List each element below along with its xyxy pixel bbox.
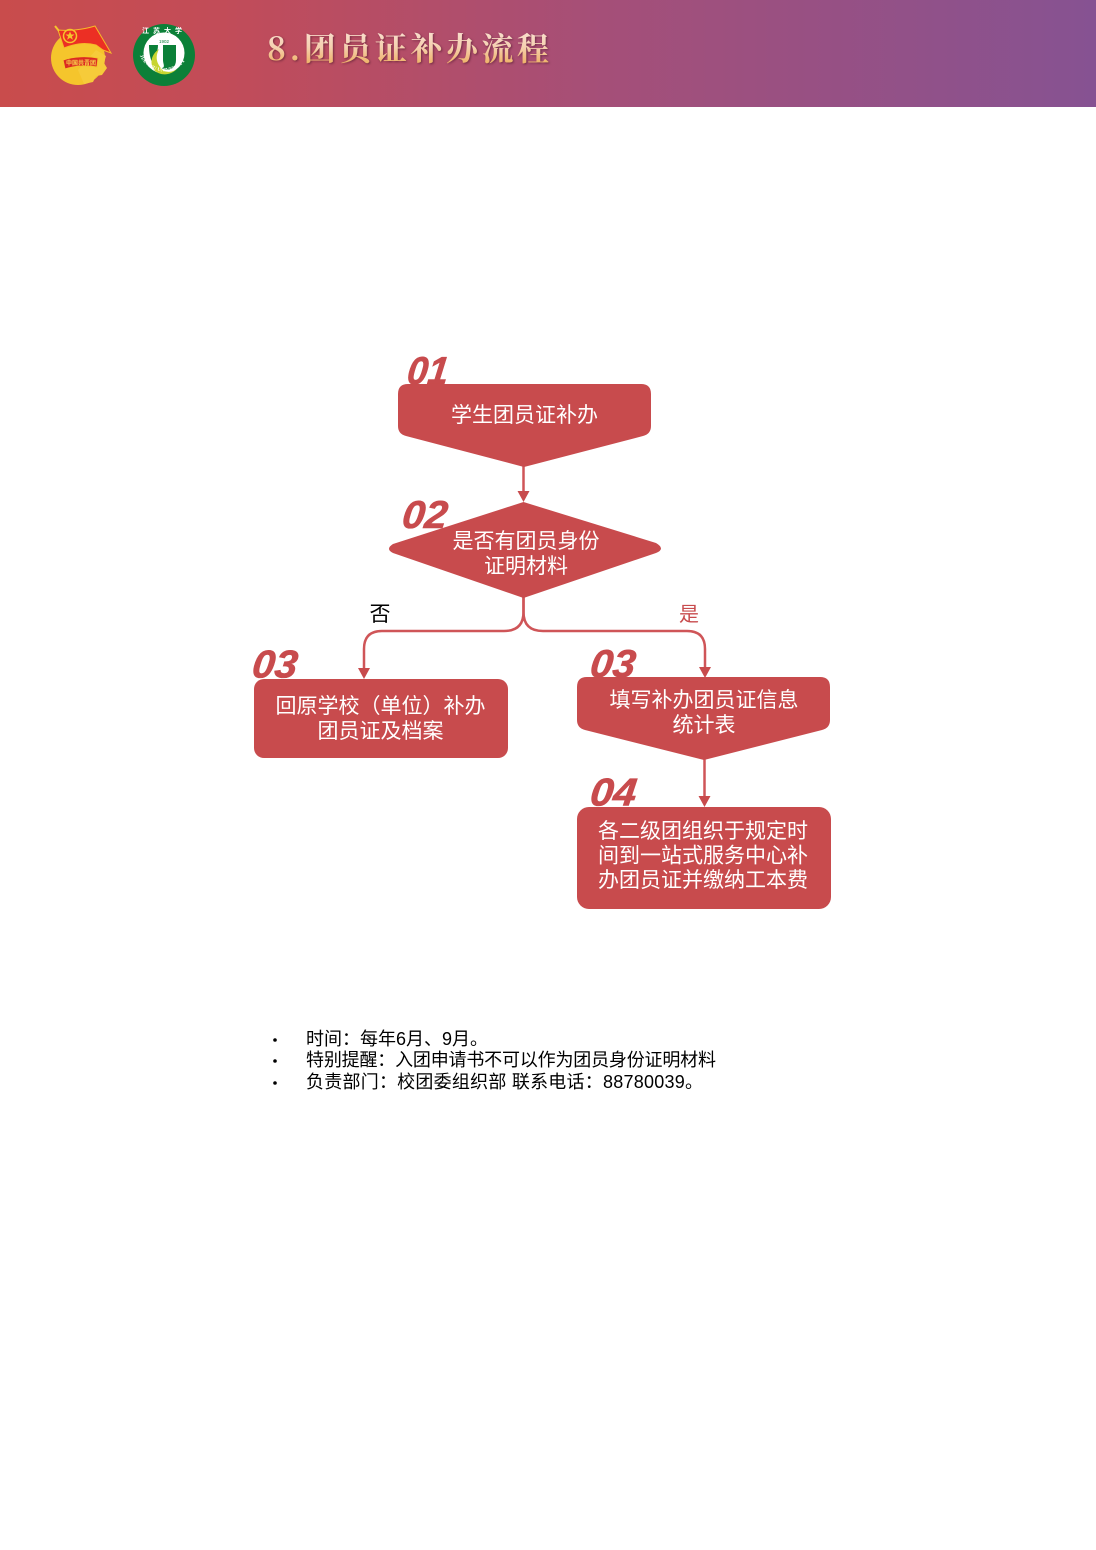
note: department: 负责部门：校团委组织部 联系电话：88780039。 bbox=[306, 1072, 703, 1092]
diamond label: 证明材料 bbox=[484, 555, 568, 578]
icon: Jiangsu University logo: 江苏大学 bbox=[142, 26, 186, 35]
connector: branch yes bbox=[524, 597, 705, 667]
icon: youth league badge: 中国共青团 bbox=[66, 58, 96, 67]
note: time: 时间：每年6月、9月。 bbox=[306, 1029, 488, 1049]
box: student applies bbox=[398, 384, 651, 467]
notes list bbox=[273, 1029, 716, 1092]
connector: branch no bbox=[364, 597, 524, 668]
step 01 bbox=[398, 350, 651, 467]
header banner bbox=[0, 0, 1096, 107]
number 02: 02 bbox=[400, 494, 450, 537]
box label: 各二级团组织于规定时 bbox=[598, 820, 808, 843]
number 03 left: 03 bbox=[250, 644, 300, 686]
connector: 01 to 02 bbox=[522, 466, 525, 491]
connector: 03 to 04 bbox=[703, 759, 706, 796]
diamond: has proof of membership bbox=[389, 502, 661, 598]
note: reminder: 特别提醒：入团申请书不可以作为团员身份证明材料 bbox=[306, 1050, 716, 1070]
label: yes: 是 bbox=[679, 604, 699, 626]
title: 8.团员证补办流程 bbox=[267, 24, 549, 70]
icon: Jiangsu University logo: JIANGSU UNIVERSITY bbox=[140, 54, 185, 72]
diamond label: 是否有团员身份 bbox=[452, 530, 600, 553]
icon: Jiangsu University logo: 1902 bbox=[159, 39, 170, 44]
box label: 团员证及档案 bbox=[318, 720, 444, 743]
number 03 right: 03 bbox=[588, 643, 638, 686]
icon: youth league badge bbox=[51, 26, 111, 85]
box label: 学生团员证补办 bbox=[451, 404, 598, 427]
step 03 right bbox=[577, 643, 830, 760]
label: no: 否 bbox=[370, 603, 390, 626]
number 01: 01 bbox=[405, 350, 451, 393]
box: pay at one-stop center bbox=[577, 807, 831, 909]
box label: 间到一站式服务中心补 bbox=[598, 844, 808, 868]
box label: 回原学校（单位）补办 bbox=[276, 695, 486, 718]
box label: 统计表 bbox=[672, 714, 736, 737]
step 04 bbox=[577, 772, 831, 909]
box: return to original school bbox=[254, 679, 508, 758]
step 02 bbox=[389, 494, 661, 598]
icon: Jiangsu University logo bbox=[133, 24, 195, 86]
step 03 left bbox=[250, 644, 508, 758]
number 04: 04 bbox=[588, 772, 639, 814]
box: fill in form bbox=[577, 677, 830, 760]
box label: 办团员证并缴纳工本费 bbox=[598, 869, 808, 892]
box label: 填写补办团员证信息 bbox=[610, 689, 798, 712]
